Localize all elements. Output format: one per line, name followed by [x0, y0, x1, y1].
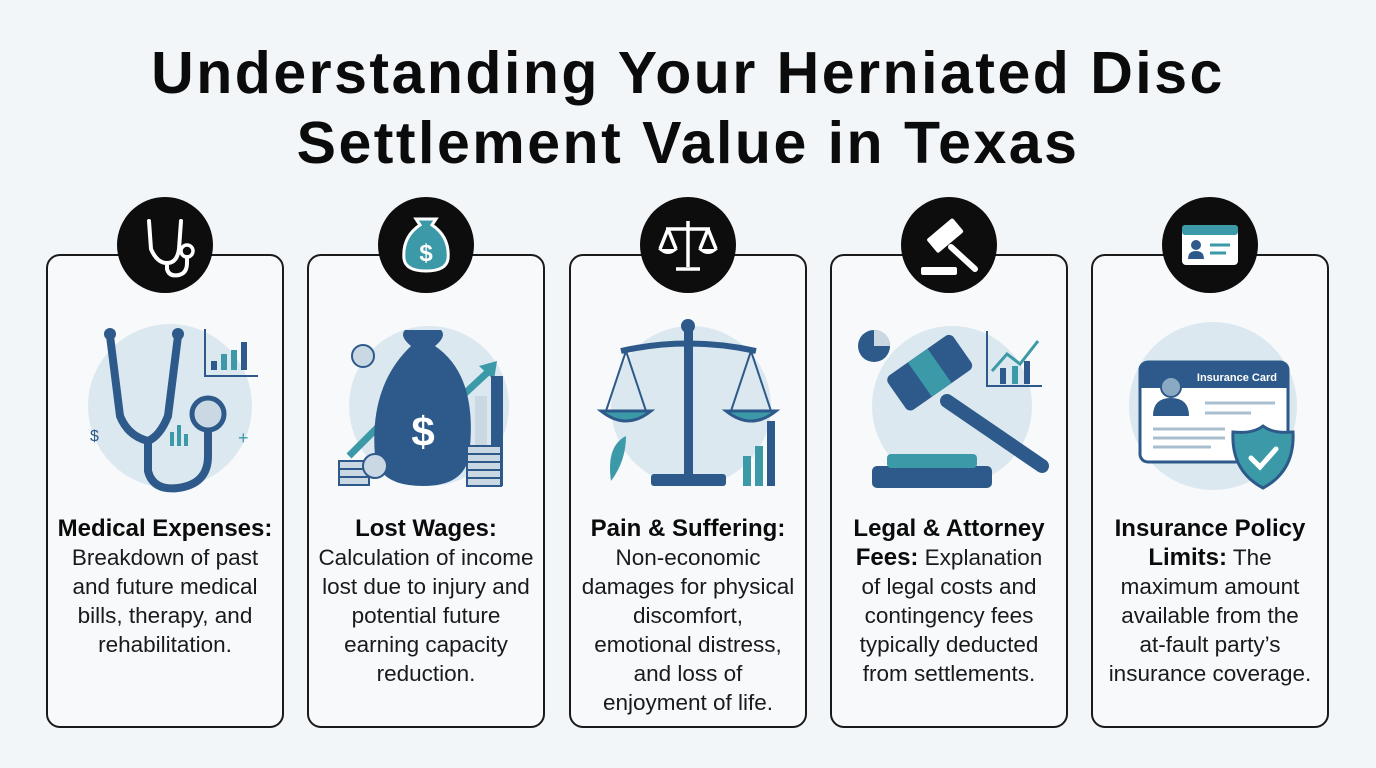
text: insurance limits: maximum amount: [1121, 574, 1299, 599]
text: insurance limits: at-fault party’s: [1140, 632, 1280, 657]
text: lost wages: [318, 515, 534, 686]
text: lost wages: potential future: [352, 603, 500, 628]
illustration: stethoscope: [88, 324, 258, 492]
illustration: stethoscope: +: [238, 428, 249, 448]
text: lost wages: earning capacity: [344, 632, 508, 657]
panel: pain & suffering: [569, 254, 807, 728]
text: insurance limits: Limits: The: [1148, 544, 1272, 571]
title: [151, 40, 1225, 176]
icon: money bag: [378, 197, 474, 293]
text: pain & suffering: and loss of: [634, 661, 742, 686]
illustration: gavel: [858, 326, 1049, 488]
icon: scales: [640, 197, 736, 293]
text: lost wages: Lost Wages:: [355, 515, 497, 542]
text: insurance limits: [1109, 515, 1311, 686]
text: lost wages: reduction.: [377, 661, 475, 686]
text: pain & suffering: emotional distress,: [594, 632, 782, 657]
text: lost wages: Calculation of income: [318, 545, 534, 570]
text: medical expenses: and future medical: [72, 574, 258, 599]
panel: lost wages: [307, 254, 545, 728]
icon: stethoscope: [117, 197, 213, 293]
text: medical expenses: bills, therapy, and: [78, 603, 252, 628]
text: legal fees: from settlements.: [863, 661, 1035, 686]
title: Settlement Value in Texas: [297, 110, 1079, 176]
text: medical expenses: Breakdown of past: [72, 545, 258, 570]
text: legal fees: typically deducted: [860, 632, 1038, 657]
text: legal fees: contingency fees: [865, 603, 1033, 628]
icon: ID card: [1162, 197, 1258, 293]
panel: insurance limits: [1091, 254, 1329, 728]
panel: legal fees: [830, 254, 1068, 728]
text: insurance limits: Insurance Policy: [1115, 515, 1305, 542]
text: pain & suffering: discomfort,: [633, 603, 743, 628]
text: legal fees: Fees: Explanation: [856, 544, 1042, 571]
illustration: insurance card: [1129, 322, 1297, 490]
text: insurance limits: insurance coverage.: [1109, 661, 1311, 686]
text: pain & suffering: Non-economic: [615, 545, 761, 570]
text: medical expenses: [58, 515, 272, 657]
text: pain & suffering: [582, 515, 794, 715]
text: insurance limits: available from the: [1121, 603, 1299, 628]
text: medical expenses: rehabilitation.: [98, 632, 232, 657]
icon: money bag: $: [419, 240, 433, 267]
text: legal fees: Legal & Attorney: [853, 515, 1045, 542]
text: legal fees: of legal costs and: [861, 574, 1037, 599]
text: lost wages: lost due to injury and: [322, 574, 530, 599]
panel: medical expenses: [46, 254, 284, 728]
text: pain & suffering: enjoyment of life.: [603, 690, 773, 715]
illustration: money bag: [338, 326, 509, 487]
text: pain & suffering: Pain & Suffering:: [591, 515, 785, 542]
text: legal fees: [853, 515, 1045, 686]
icon: gavel: [901, 197, 997, 293]
illustration: stethoscope: $: [90, 428, 99, 445]
illustration: insurance card: Insurance Card: [1197, 372, 1277, 384]
illustration: scales: [596, 319, 780, 486]
illustration: money bag: $: [411, 408, 435, 455]
text: pain & suffering: damages for physical: [582, 574, 794, 599]
title: Understanding Your Herniated Disc: [151, 40, 1225, 106]
text: medical expenses: Medical Expenses:: [58, 515, 272, 542]
